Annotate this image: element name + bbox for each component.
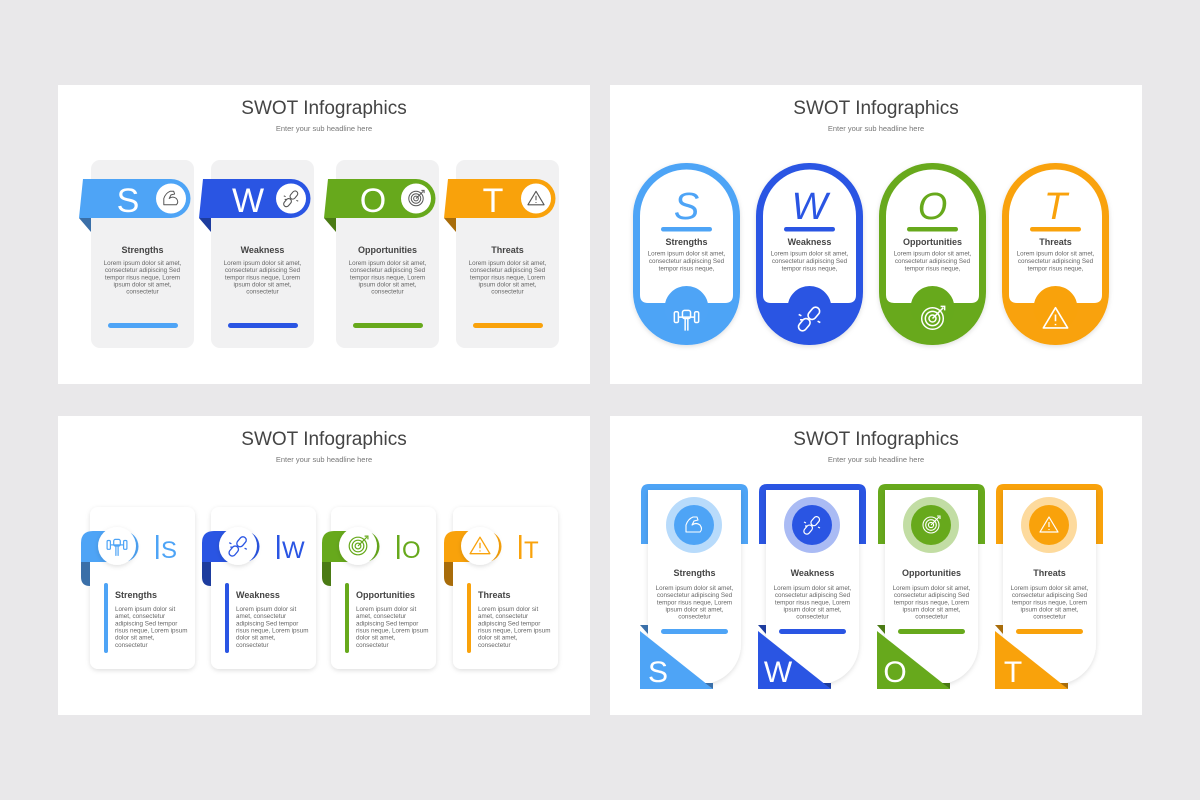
title: SWOT Infographics	[793, 429, 959, 450]
subtitle: Enter your sub headline here	[276, 124, 372, 133]
card: Opportunities: dolor sit amet,	[356, 634, 396, 642]
subtitle: Enter your sub headline here	[828, 455, 924, 464]
card: Strengths: consectetur adipiscing Sed	[657, 592, 733, 599]
card: Weakness: W	[232, 182, 264, 220]
card: Strengths: S	[117, 182, 139, 220]
card: Strengths: ipsum dolor sit amet,	[113, 282, 172, 288]
pill: Opportunities: tempor risus neque,	[905, 266, 961, 272]
card: Strengths: Lorem ipsum dolor sit amet,	[104, 260, 182, 267]
card: Weakness: Weakness	[791, 568, 834, 578]
pill: Strengths: S	[674, 186, 699, 228]
subtitle: Enter your sub headline here	[276, 455, 372, 464]
card: Opportunities: tempor risus neque, Lorem	[894, 600, 969, 606]
card: Weakness	[199, 160, 314, 348]
card: Weakness: W	[764, 656, 793, 689]
pill: Threats: Lorem ipsum dolor sit amet,	[1017, 250, 1095, 258]
card: Weakness: amet, consectetur	[236, 613, 286, 620]
card: Weakness: consectetur	[796, 614, 829, 620]
card: Opportunities: consectetur	[356, 642, 389, 649]
pill: Strengths: tempor risus neque,	[659, 266, 715, 272]
card: Weakness: Lorem ipsum dolor sit amet,	[224, 260, 302, 267]
card: Threats: T	[1004, 656, 1022, 689]
card: Opportunities	[324, 160, 439, 348]
card: Threats: tempor risus neque, Lorem	[470, 274, 545, 282]
card: Threats: Lorem ipsum dolor sit amet,	[469, 260, 547, 267]
card: Opportunities: consectetur	[915, 614, 948, 620]
card: Opportunities: Opportunities	[902, 568, 961, 578]
card: Strengths: S	[161, 537, 177, 564]
pill: Threats	[1002, 163, 1109, 345]
card: Strengths: amet, consectetur	[115, 613, 165, 620]
card: Threats: Threats	[1033, 568, 1066, 578]
card: Opportunities: ipsum dolor sit amet,	[902, 606, 961, 614]
card: Opportunities: ipsum dolor sit amet,	[358, 282, 417, 288]
card: Opportunities	[322, 507, 436, 669]
card: Threats: tempor risus neque, Lorem	[1012, 600, 1087, 606]
card: Opportunities: O	[402, 537, 421, 564]
card: Threats: Threats	[478, 590, 511, 600]
card: Opportunities: consectetur adipiscing Sed	[350, 267, 426, 274]
pill: Opportunities: Lorem ipsum dolor sit amet,	[894, 250, 972, 258]
card: Opportunities: risus neque, Lorem ipsum	[356, 628, 428, 634]
card: Weakness: W	[282, 537, 305, 564]
card: Weakness: consectetur adipiscing Sed	[225, 267, 301, 274]
card: Strengths	[79, 160, 194, 348]
card: Opportunities: Lorem ipsum dolor sit amet,	[349, 260, 427, 267]
card: Strengths	[81, 507, 195, 669]
pill: Weakness: Weakness	[788, 237, 831, 247]
card: Opportunities: O	[360, 182, 386, 220]
panel: bottom-right slide	[610, 416, 1142, 715]
card: Weakness: Lorem ipsum dolor sit	[236, 606, 296, 613]
card: Threats: ipsum dolor sit amet,	[1020, 606, 1079, 614]
pill: Threats: tempor risus neque,	[1028, 266, 1084, 272]
card: Strengths: Strengths	[673, 568, 716, 578]
card: Threats: ipsum dolor sit amet,	[478, 282, 537, 288]
pill: Weakness	[756, 163, 863, 345]
card: Opportunities: amet, consectetur	[356, 613, 406, 620]
title: SWOT Infographics	[793, 98, 959, 119]
card: Strengths: tempor risus neque, Lorem	[657, 600, 732, 606]
card: Weakness: Lorem ipsum dolor sit amet,	[774, 585, 852, 592]
card: Opportunities: adipiscing Sed tempor	[356, 620, 418, 628]
card: Threats: Threats	[491, 245, 524, 255]
pill: Weakness: W	[792, 186, 831, 228]
card: Weakness: Weakness	[241, 245, 284, 255]
card: Weakness: consectetur	[236, 642, 269, 649]
subtitle: Enter your sub headline here	[828, 124, 924, 133]
card: Opportunities: consectetur adipiscing Sed	[894, 592, 970, 599]
card: Threats: Lorem ipsum dolor sit amet,	[1011, 585, 1089, 592]
card: Threats	[444, 160, 559, 348]
card: Opportunities: O	[883, 656, 907, 689]
card: Threats: T	[524, 537, 539, 564]
card: Threats	[444, 507, 558, 669]
card: Threats: Lorem ipsum dolor sit	[478, 606, 538, 613]
pill: Weakness: tempor risus neque,	[782, 266, 838, 272]
card: Weakness: consectetur	[246, 288, 279, 296]
pill: Weakness: consectetur adipiscing Sed	[772, 258, 848, 265]
card: Weakness: adipiscing Sed tempor	[236, 620, 298, 628]
pill: Strengths: Lorem ipsum dolor sit amet,	[648, 250, 726, 258]
panel: top-left slide	[58, 85, 590, 384]
card: Threats: consectetur adipiscing Sed	[470, 267, 546, 274]
pill: Threats: Threats	[1039, 237, 1072, 247]
card: Strengths: consectetur adipiscing Sed	[105, 267, 181, 274]
card: Weakness: Weakness	[236, 590, 280, 600]
card: Weakness: tempor risus neque, Lorem	[775, 600, 850, 606]
card: Weakness	[202, 507, 316, 669]
card: Threats: consectetur adipiscing Sed	[1012, 592, 1088, 599]
card: Strengths: ipsum dolor sit amet,	[665, 606, 724, 614]
card: Strengths	[640, 484, 748, 689]
pill: Strengths: Strengths	[665, 237, 708, 247]
card: Opportunities: tempor risus neque, Lorem	[350, 274, 425, 282]
card: Opportunities: Lorem ipsum dolor sit amet,	[893, 585, 971, 592]
pill: Threats: consectetur adipiscing Sed	[1018, 258, 1094, 265]
card: Threats: adipiscing Sed tempor	[478, 620, 540, 628]
panel: top-right slide	[610, 85, 1142, 384]
card: Strengths: Lorem ipsum dolor sit	[115, 606, 175, 613]
card: Strengths: Strengths	[121, 245, 164, 255]
card: Weakness: consectetur adipiscing Sed	[775, 592, 851, 599]
title: SWOT Infographics	[241, 98, 407, 119]
card: Weakness: ipsum dolor sit amet,	[783, 606, 842, 614]
card: Strengths: risus neque, Lorem ipsum	[115, 628, 187, 634]
card: Strengths: tempor risus neque, Lorem	[105, 274, 180, 282]
card: Strengths: consectetur	[126, 288, 159, 296]
pill: Opportunities: consectetur adipiscing Sed	[895, 258, 971, 265]
card: Opportunities: Opportunities	[358, 245, 417, 255]
card: Strengths: S	[648, 656, 668, 689]
pill: Opportunities: O	[918, 186, 947, 228]
title: SWOT Infographics	[241, 429, 407, 450]
card: Strengths: Lorem ipsum dolor sit amet,	[656, 585, 734, 592]
card: Threats: T	[483, 182, 503, 220]
card: Weakness: ipsum dolor sit amet,	[233, 282, 292, 288]
pill: Weakness: Lorem ipsum dolor sit amet,	[771, 250, 849, 258]
pill: Threats: T	[1044, 186, 1070, 228]
card: Strengths: dolor sit amet,	[115, 634, 155, 642]
panel: bottom-left slide	[58, 416, 590, 715]
card: Threats: consectetur	[491, 288, 524, 296]
pill: Strengths	[633, 163, 740, 345]
card: Weakness: dolor sit amet,	[236, 634, 276, 642]
card: Threats: consectetur	[478, 642, 511, 649]
card: Strengths: Strengths	[115, 590, 157, 600]
card: Threats	[995, 484, 1103, 689]
card: Strengths: consectetur	[678, 614, 711, 620]
card: Opportunities: Opportunities	[356, 590, 415, 600]
card: Threats: amet, consectetur	[478, 613, 528, 620]
pill: Opportunities: Opportunities	[903, 237, 962, 247]
card: Opportunities	[877, 484, 985, 689]
card: Weakness: risus neque, Lorem ipsum	[236, 628, 308, 634]
card: Strengths: consectetur	[115, 642, 148, 649]
card: Opportunities: Lorem ipsum dolor sit	[356, 606, 416, 613]
card: Strengths: adipiscing Sed tempor	[115, 620, 177, 628]
card: Threats: consectetur	[1033, 614, 1066, 620]
card: Opportunities: consectetur	[371, 288, 404, 296]
card: Weakness: tempor risus neque, Lorem	[225, 274, 300, 282]
pill: Strengths: consectetur adipiscing Sed	[649, 258, 725, 265]
card: Threats: risus neque, Lorem ipsum	[478, 628, 550, 634]
card: Weakness	[758, 484, 866, 689]
card: Threats: dolor sit amet,	[478, 634, 518, 642]
pill: Opportunities	[879, 163, 986, 345]
